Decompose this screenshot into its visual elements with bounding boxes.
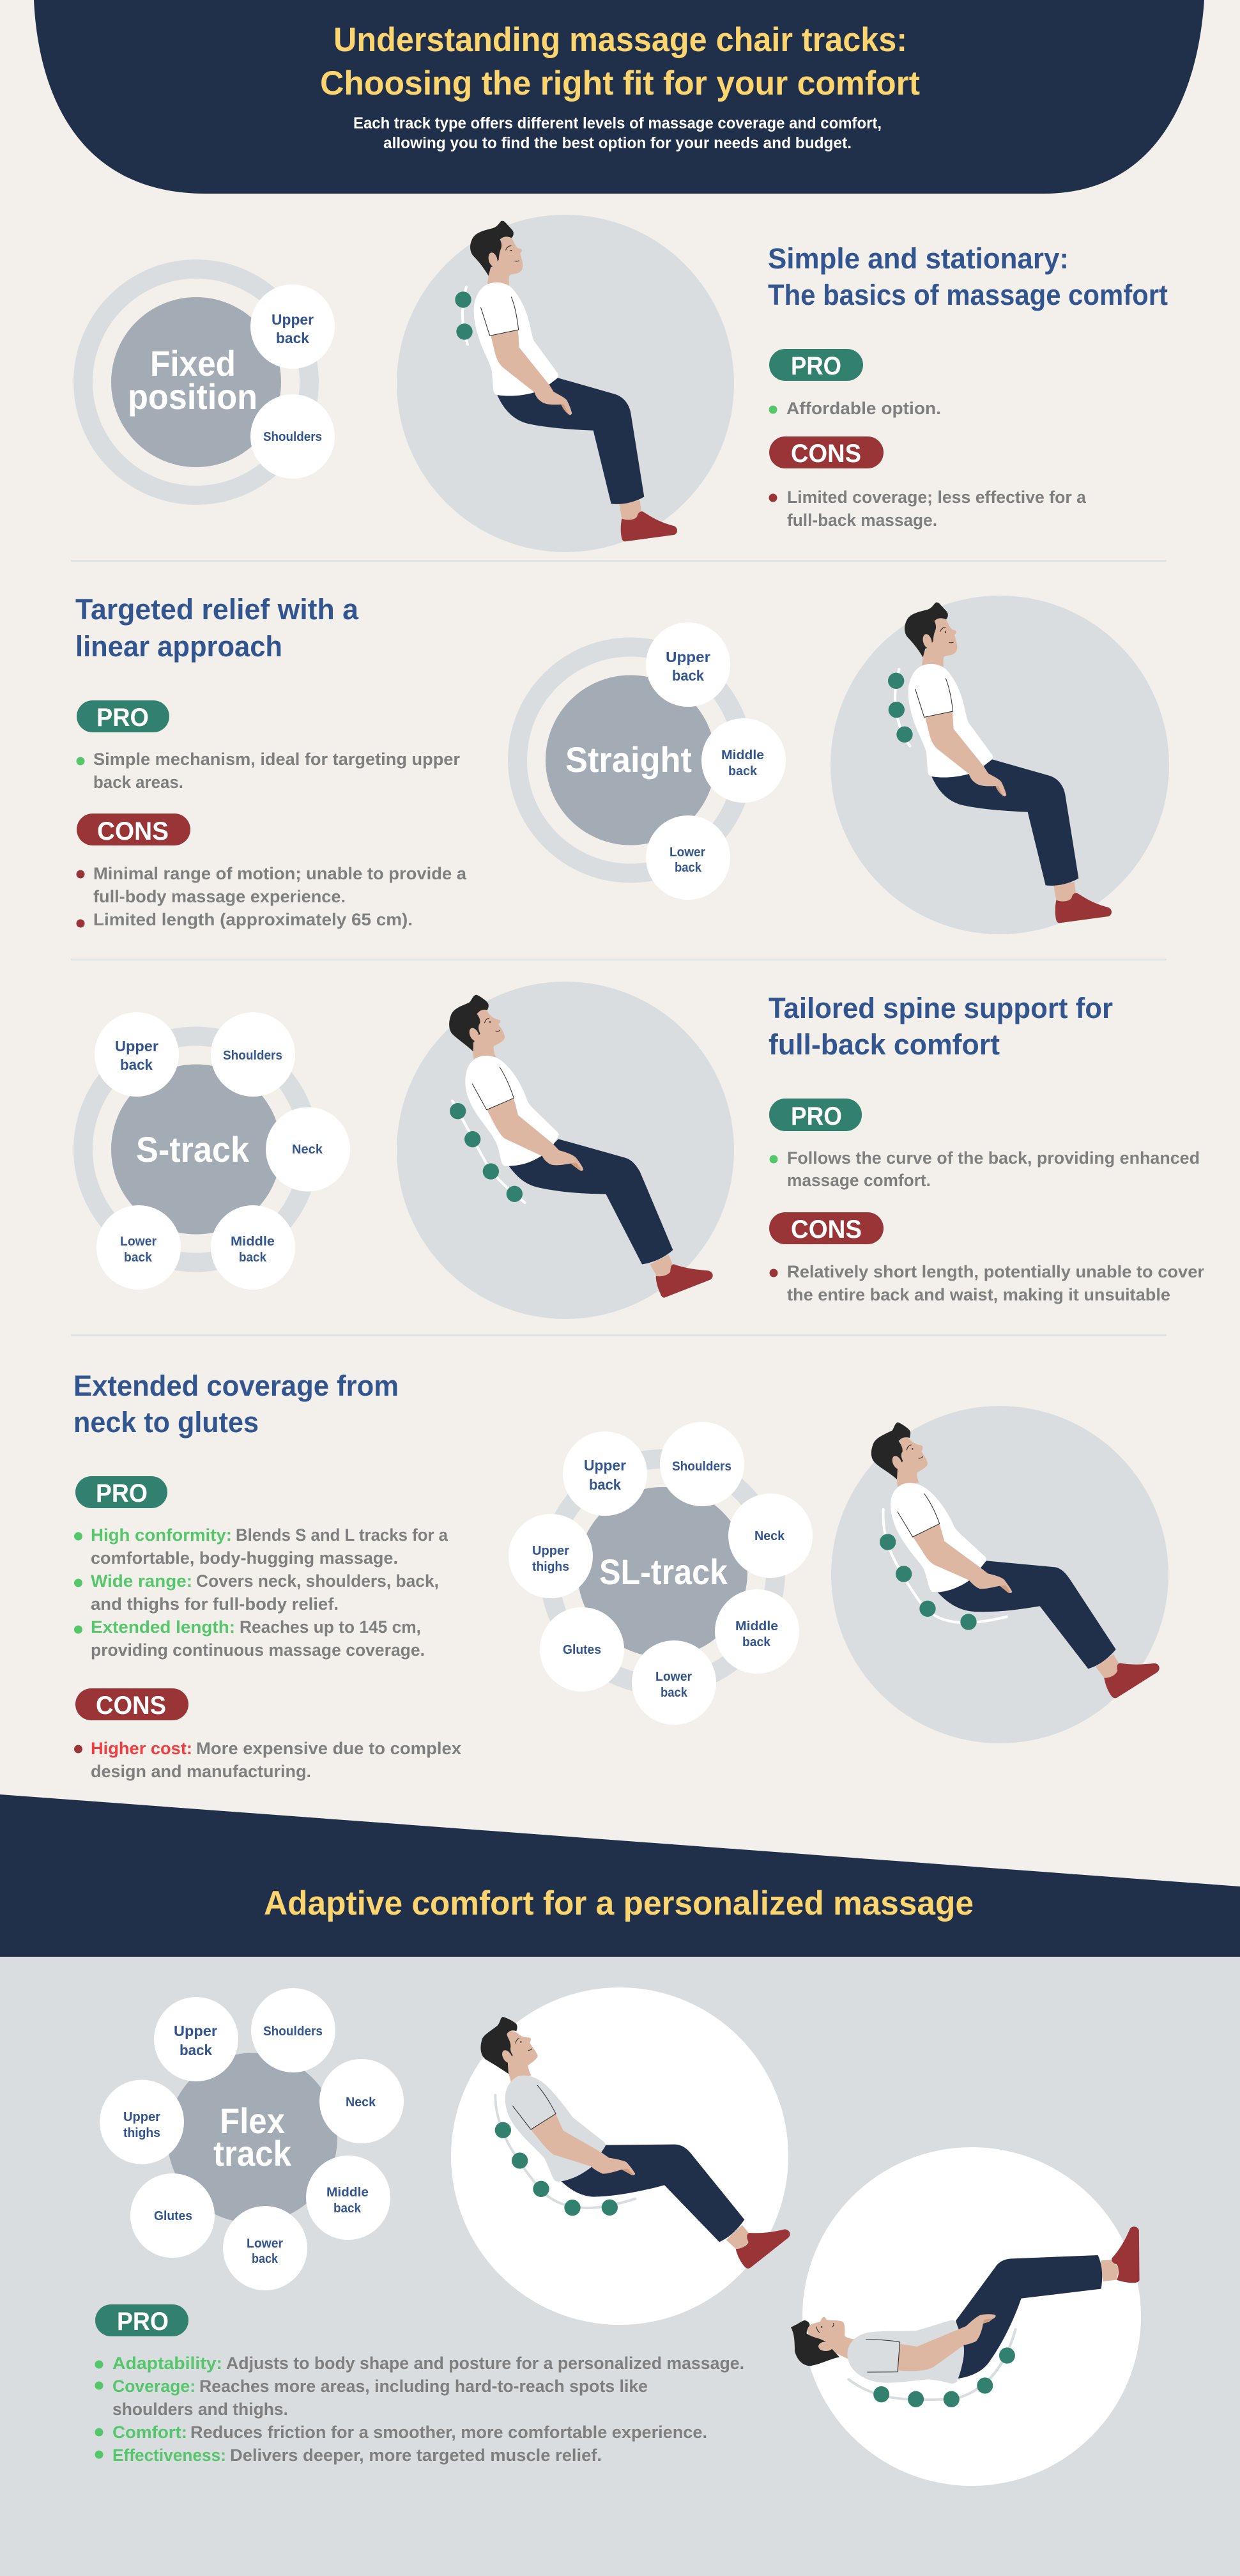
diagram: straight: back bbox=[728, 764, 758, 778]
cons list: the entire back and waist, making it unsuitable bbox=[787, 1285, 1170, 1304]
diagram: sl-track: Upper bbox=[532, 1544, 569, 1558]
heading bbox=[75, 593, 359, 663]
diagram: fixed position: Upper bbox=[272, 311, 314, 328]
figure: seated man with three rollers bbox=[830, 596, 1169, 934]
heading: linear approach bbox=[75, 630, 282, 663]
heading bbox=[73, 1369, 399, 1438]
pro list: Reaches more areas, including hard-to-reach spots like bbox=[199, 2377, 648, 2396]
pro badge bbox=[769, 349, 863, 381]
diagram: sl-track: back bbox=[661, 1686, 688, 1700]
pro list: Follows the curve of the back, providing enhanced bbox=[787, 1148, 1200, 1168]
pro list: Adjusts to body shape and posture for a personalized massage. bbox=[226, 2354, 744, 2373]
figure: reclined man on flex track bbox=[451, 1987, 790, 2325]
cons badge bbox=[75, 1688, 188, 1720]
diagram: sl-track: Neck bbox=[754, 1529, 785, 1543]
heading bbox=[769, 992, 1113, 1061]
diagram: flex track: Neck bbox=[346, 2095, 376, 2109]
pro badge: PRO bbox=[791, 1102, 842, 1130]
diagram: fixed position bbox=[83, 269, 335, 495]
pro list: Adaptability: bbox=[112, 2354, 222, 2373]
cons badge bbox=[769, 1212, 884, 1244]
diagram: fixed position: back bbox=[276, 330, 309, 346]
panel: sl-track bbox=[73, 1369, 1168, 1781]
diagram: sl-track: Upper bbox=[584, 1457, 626, 1474]
pro list: Reduces friction for a smoother, more comfortable experience. bbox=[190, 2423, 707, 2442]
diagram: s-track bbox=[83, 1012, 350, 1290]
diagram: straight: back bbox=[675, 861, 702, 875]
pro badge bbox=[95, 2304, 188, 2336]
cons list: More expensive due to complex bbox=[196, 1739, 461, 1758]
diagram: flex track: thighs bbox=[123, 2126, 160, 2140]
cons list: Limited length (approximately 65 cm). bbox=[93, 910, 413, 929]
pro badge: PRO bbox=[96, 704, 149, 732]
cons badge bbox=[77, 814, 190, 845]
subtitle: Each track type offers different levels of massage coverage and comfort, bbox=[353, 114, 882, 132]
diagram: straight: Lower bbox=[670, 845, 705, 860]
diagram: s-track: Shoulders bbox=[223, 1049, 282, 1063]
diagram: sl-track: back bbox=[589, 1476, 621, 1493]
cons list: full-back massage. bbox=[787, 511, 937, 530]
diagram: flex track: Glutes bbox=[154, 2209, 192, 2223]
pro list: shoulders and thighs. bbox=[112, 2400, 288, 2419]
pro list: massage comfort. bbox=[787, 1171, 931, 1190]
flex section banner: Adaptive comfort for a personalized massage bbox=[264, 1885, 974, 1922]
diagram: sl-track: Glutes bbox=[563, 1643, 601, 1657]
cons list: Relatively short length, potentially unable to cover bbox=[787, 1262, 1204, 1281]
subtitle bbox=[353, 114, 882, 152]
pro list bbox=[77, 750, 460, 792]
title: Choosing the right fit for your comfort bbox=[320, 65, 920, 102]
pro list: and thighs for full-body relief. bbox=[91, 1594, 339, 1614]
pro list: Coverage: bbox=[112, 2377, 195, 2396]
pro list: Delivers deeper, more targeted muscle relief. bbox=[230, 2446, 602, 2465]
diagram: flex track: back bbox=[180, 2042, 212, 2058]
heading: The basics of massage comfort bbox=[768, 279, 1168, 311]
pro list: Wide range: bbox=[91, 1571, 192, 1591]
heading: Tailored spine support for bbox=[769, 992, 1113, 1024]
diagram: fixed position: Fixed bbox=[150, 343, 236, 383]
diagram: s-track: Neck bbox=[292, 1143, 323, 1157]
figure: fully reclined man on flex track bbox=[791, 2147, 1141, 2486]
cons list: Higher cost: bbox=[91, 1739, 192, 1758]
pro list bbox=[769, 1148, 1200, 1190]
diagram: straight: Middle bbox=[721, 748, 764, 762]
cons list bbox=[769, 1262, 1204, 1304]
diagram: sl-track: Middle bbox=[735, 1619, 778, 1633]
cons badge: CONS bbox=[791, 1215, 862, 1244]
pro list: Effectiveness: bbox=[112, 2446, 226, 2465]
heading: Targeted relief with a bbox=[75, 593, 359, 626]
pro list: Extended length: bbox=[91, 1617, 235, 1637]
cons badge: CONS bbox=[791, 440, 861, 468]
figure: reclined man on sl-track bbox=[831, 1406, 1168, 1743]
diagram: flex track: back bbox=[252, 2252, 279, 2266]
pro badge: PRO bbox=[96, 1479, 148, 1508]
figure: reclined man with four rollers bbox=[397, 982, 734, 1319]
cons list: Limited coverage; less effective for a bbox=[787, 488, 1087, 507]
title bbox=[320, 21, 920, 102]
flex section banner bbox=[0, 1794, 1240, 1957]
panel: straight track bbox=[75, 593, 1169, 934]
panel: s-track bbox=[83, 982, 1204, 1319]
pro badge bbox=[77, 700, 169, 732]
pro list: Reaches up to 145 cm, bbox=[240, 1617, 421, 1637]
figure: seated man with two fixed rollers bbox=[397, 215, 734, 552]
pro list: providing continuous massage coverage. bbox=[91, 1640, 425, 1660]
cons badge: CONS bbox=[97, 817, 169, 845]
panel: flex track bbox=[95, 1987, 1141, 2486]
diagram: flex track: Shoulders bbox=[263, 2025, 323, 2039]
panel: flex track background bbox=[0, 1955, 1240, 2576]
pro badge: PRO bbox=[117, 2308, 169, 2336]
cons badge: CONS bbox=[96, 1692, 166, 1720]
diagram: s-track: back bbox=[120, 1056, 153, 1073]
subtitle: allowing you to find the best option for your needs and budget. bbox=[383, 134, 852, 152]
pro list: Blends S and L tracks for a bbox=[236, 1525, 448, 1545]
diagram: straight: Upper bbox=[666, 649, 710, 665]
heading: Extended coverage from bbox=[73, 1369, 399, 1402]
heading: neck to glutes bbox=[73, 1406, 259, 1438]
diagram: flex track: track bbox=[213, 2133, 292, 2173]
panel: fixed position track bbox=[83, 215, 1168, 552]
diagram: flex track: Lower bbox=[247, 2237, 283, 2251]
pro list: back areas. bbox=[93, 773, 183, 792]
diagram: s-track: Middle bbox=[231, 1235, 275, 1249]
pro list: Affordable option. bbox=[786, 399, 941, 418]
diagram: flex track: Flex bbox=[220, 2101, 285, 2141]
cons list: design and manufacturing. bbox=[91, 1762, 311, 1781]
pro list: Comfort: bbox=[112, 2423, 187, 2442]
pro badge: PRO bbox=[791, 352, 841, 380]
cons badge bbox=[769, 436, 884, 468]
cons list: Minimal range of motion; unable to provide a bbox=[93, 864, 467, 883]
pro list: Covers neck, shoulders, back, bbox=[196, 1571, 439, 1591]
diagram: s-track: back bbox=[239, 1251, 267, 1265]
diagram: s-track: Upper bbox=[115, 1038, 158, 1054]
diagram: straight: Straight bbox=[565, 739, 692, 780]
diagram: straight: back bbox=[672, 667, 704, 684]
diagram: straight bbox=[517, 622, 786, 900]
diagram: flex track: Upper bbox=[174, 2023, 217, 2039]
diagram: fixed position: Shoulders bbox=[263, 430, 322, 444]
diagram: fixed position: position bbox=[128, 376, 257, 417]
heading: Simple and stationary: bbox=[768, 242, 1069, 275]
diagram: flex track: back bbox=[333, 2202, 362, 2216]
diagram: s-track: S-track bbox=[136, 1129, 250, 1169]
pro list: comfortable, body-hugging massage. bbox=[91, 1548, 398, 1568]
heading: full-back comfort bbox=[769, 1028, 1000, 1061]
pro list: High conformity: bbox=[91, 1525, 232, 1545]
diagram: sl-track: Shoulders bbox=[672, 1460, 731, 1474]
diagram: flex track: Middle bbox=[326, 2186, 369, 2200]
cons list bbox=[77, 864, 467, 929]
pro list bbox=[74, 1525, 448, 1660]
diagram: s-track: Lower bbox=[120, 1235, 157, 1249]
pro list: Simple mechanism, ideal for targeting upper bbox=[93, 750, 460, 769]
cons list: full-body massage experience. bbox=[93, 887, 346, 906]
diagram: s-track: back bbox=[124, 1251, 153, 1265]
diagram: sl-track: SL-track bbox=[599, 1552, 728, 1592]
diagram: sl-track: back bbox=[742, 1635, 771, 1649]
diagram: flex track: Upper bbox=[123, 2110, 160, 2124]
diagram: flex track bbox=[100, 1988, 404, 2290]
cons list bbox=[769, 488, 1087, 530]
cons list bbox=[74, 1739, 461, 1781]
heading bbox=[768, 242, 1168, 311]
pro list bbox=[95, 2354, 744, 2465]
pro badge bbox=[769, 1099, 862, 1131]
pro badge bbox=[75, 1476, 167, 1508]
diagram: sl-track bbox=[509, 1422, 813, 1725]
diagram: sl-track: thighs bbox=[532, 1560, 569, 1574]
header banner bbox=[34, 0, 1204, 194]
diagram: sl-track: Lower bbox=[655, 1670, 692, 1684]
title: Understanding massage chair tracks: bbox=[333, 21, 907, 59]
